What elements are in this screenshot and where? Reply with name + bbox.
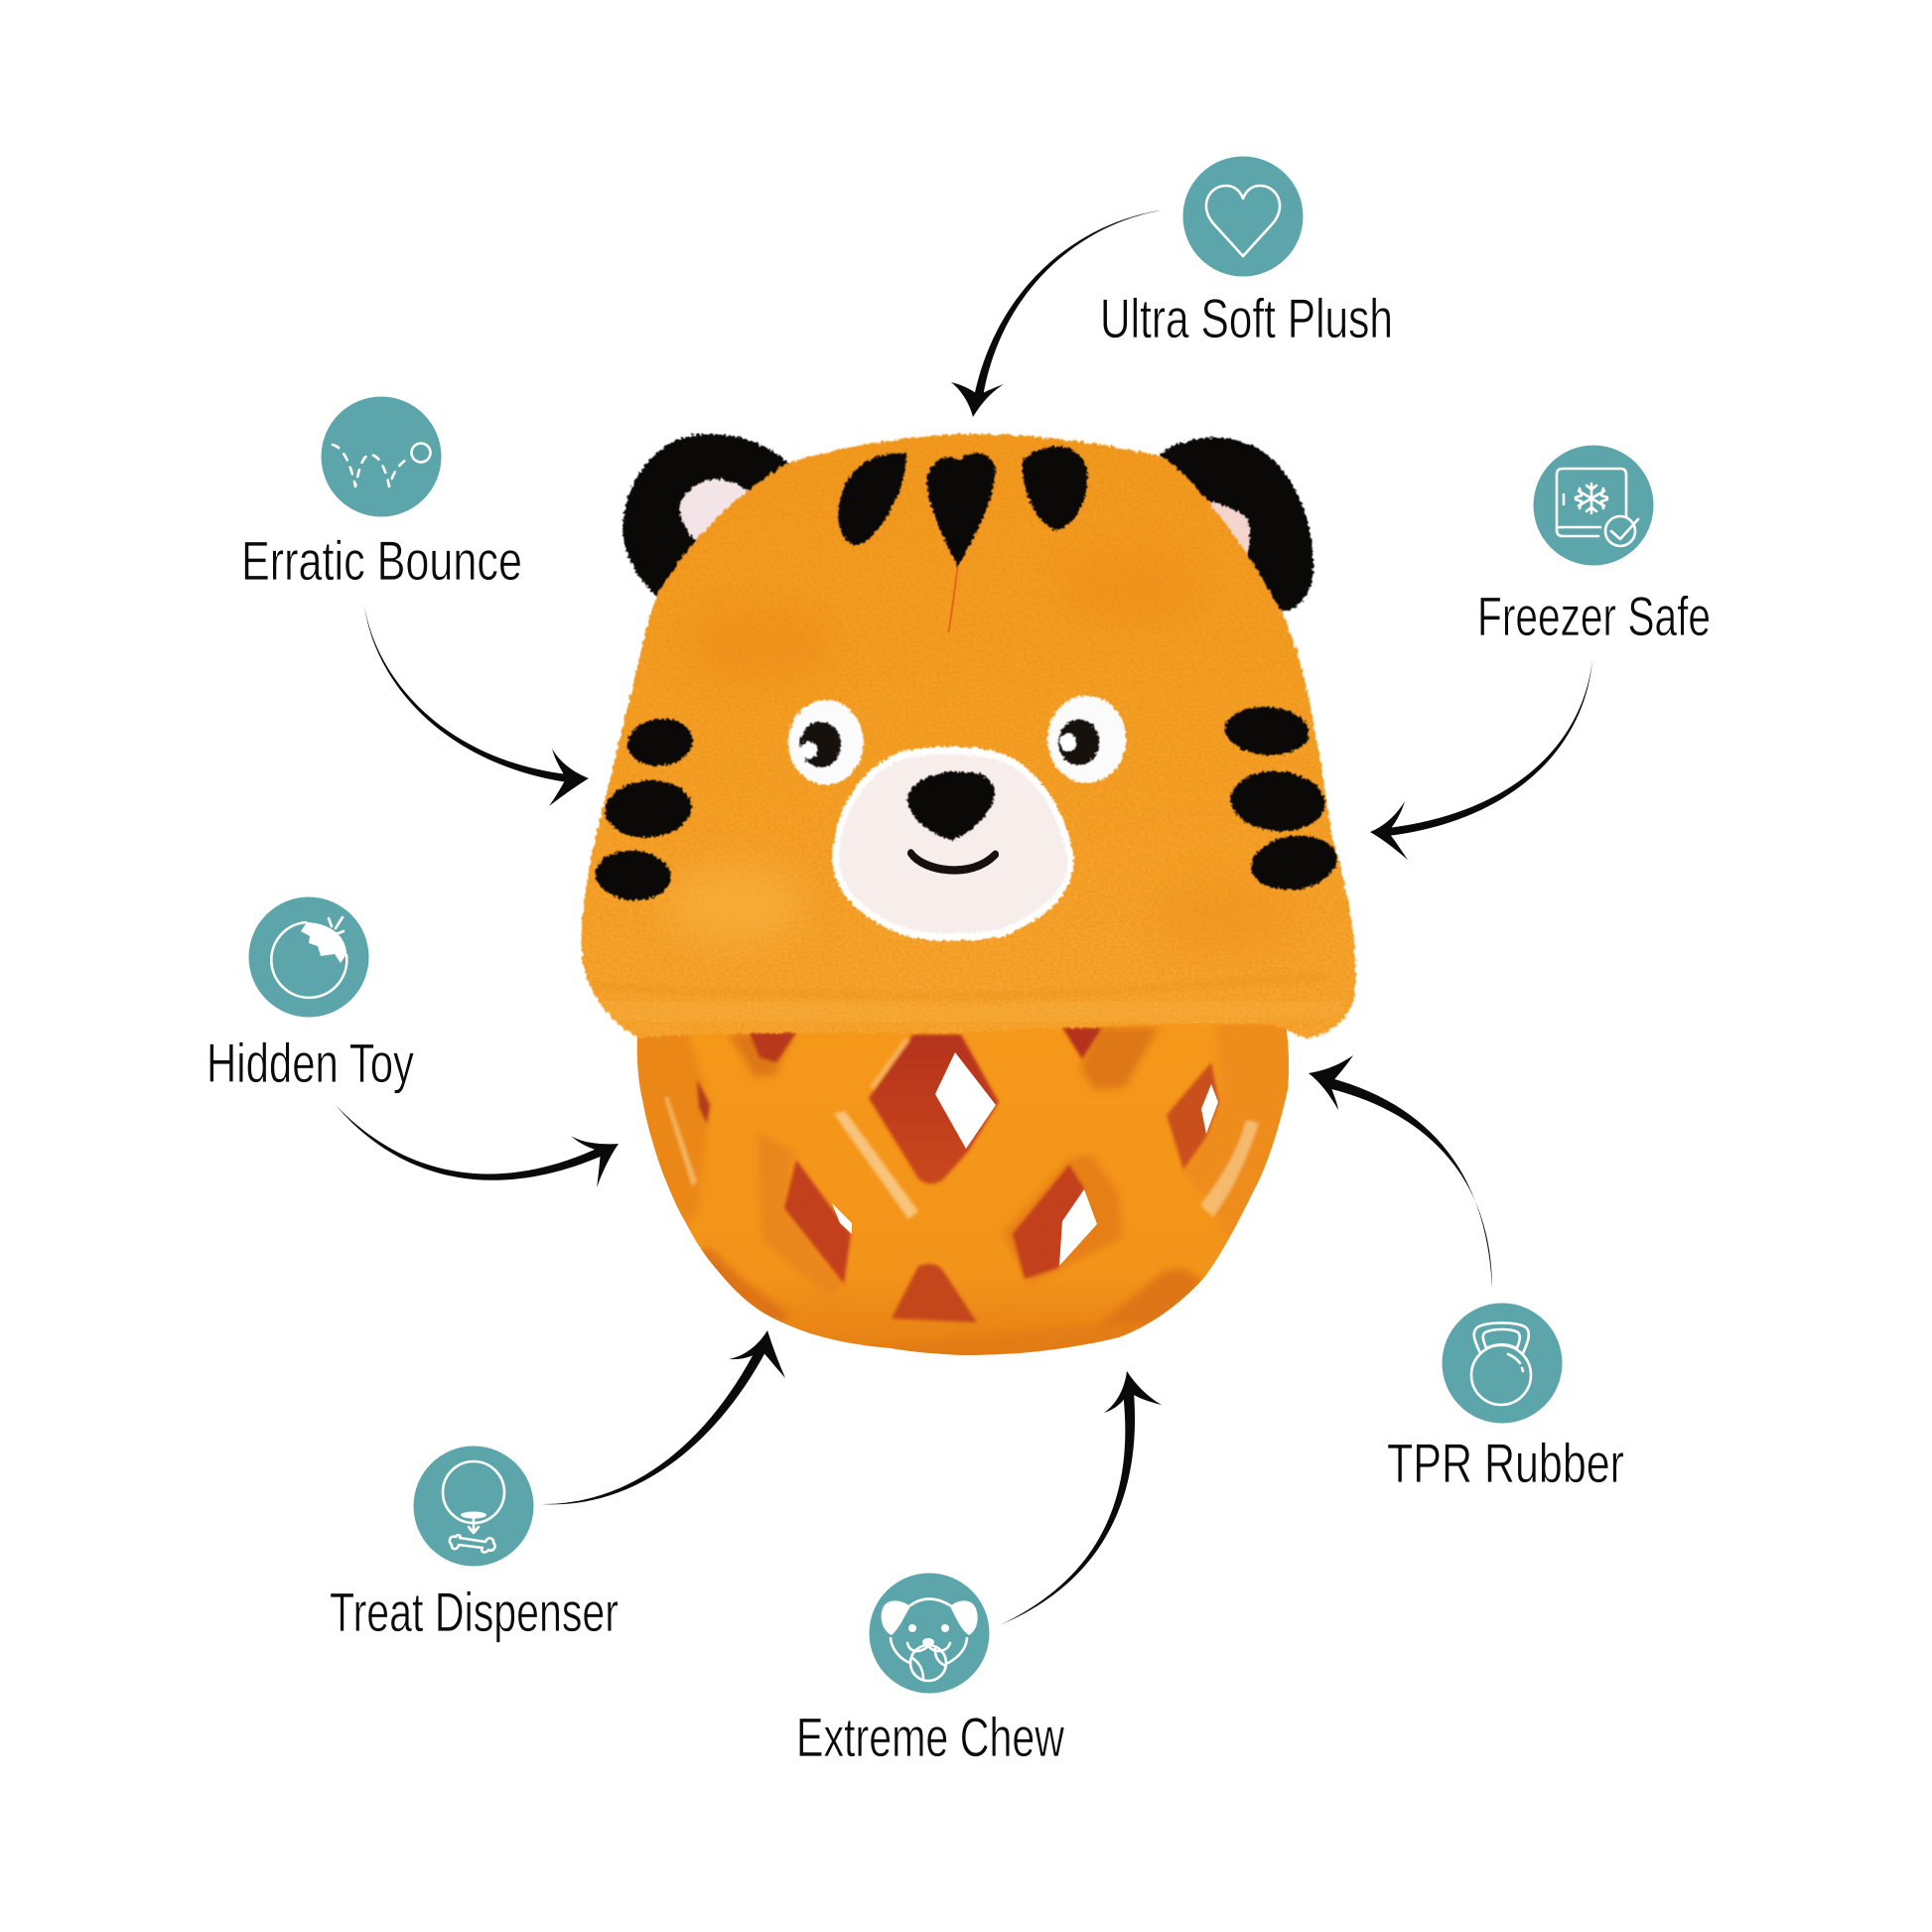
icon: ball dropping a bone — [443, 1461, 504, 1552]
badge — [870, 1573, 989, 1694]
icon: freezer with snowflake and check — [1557, 469, 1638, 546]
eyes — [788, 695, 1126, 784]
arrow: freezer — [1370, 660, 1592, 860]
stripes and face — [595, 446, 1339, 937]
plush hat body — [582, 434, 1356, 1038]
badge — [322, 397, 441, 516]
mouth — [910, 853, 996, 870]
plush ears — [622, 434, 1313, 612]
muzzle — [836, 751, 1070, 937]
arrow: chew — [1000, 1371, 1162, 1625]
badge — [413, 1446, 534, 1567]
feature: Freezer Safe — [1477, 445, 1711, 647]
label: Ultra Soft Plush — [1100, 287, 1393, 349]
side stripes — [595, 704, 1339, 902]
arrow: hidden toy — [336, 1105, 619, 1187]
arrow: treat — [541, 1330, 785, 1504]
badge — [1533, 445, 1654, 566]
icon: heart — [1206, 186, 1280, 256]
see-through gaps — [832, 1052, 1218, 1266]
label: Freezer Safe — [1477, 585, 1711, 647]
label: Extreme Chew — [796, 1706, 1064, 1768]
label: Treat Dispenser — [330, 1581, 619, 1643]
ball shading and holes — [630, 1023, 1296, 1362]
icon: dog with ball — [882, 1598, 978, 1681]
icon: bouncing ball — [333, 443, 431, 486]
infographic canvas — [209, 157, 1710, 1757]
badge — [1183, 157, 1303, 276]
label: Erratic Bounce — [241, 529, 522, 592]
label: TPR Rubber — [1387, 1432, 1624, 1494]
rubber ball — [630, 1023, 1296, 1362]
icon: cracked ball — [271, 917, 346, 998]
arrow: bounce — [364, 606, 589, 806]
feature: Extreme Chew — [796, 1573, 1064, 1768]
forehead seam — [948, 567, 958, 632]
nose — [906, 772, 994, 841]
feature: Hidden Toy — [207, 897, 414, 1094]
top stripes — [838, 446, 1087, 567]
feature: Erratic Bounce — [241, 397, 522, 592]
feature: Ultra Soft Plush — [1100, 157, 1393, 349]
arrow: plush — [951, 209, 1167, 417]
label: Hidden Toy — [207, 1032, 414, 1094]
gloss highlights — [664, 1037, 1259, 1219]
badge — [1442, 1303, 1563, 1424]
badge — [248, 897, 369, 1017]
feature: Treat Dispenser — [330, 1446, 619, 1643]
arrow: rubber — [1309, 1055, 1492, 1289]
product: tiger plush — [582, 434, 1356, 1038]
icon: kettlebell — [1471, 1322, 1531, 1405]
feature: TPR Rubber — [1387, 1303, 1624, 1494]
ball silhouette — [637, 1023, 1289, 1355]
